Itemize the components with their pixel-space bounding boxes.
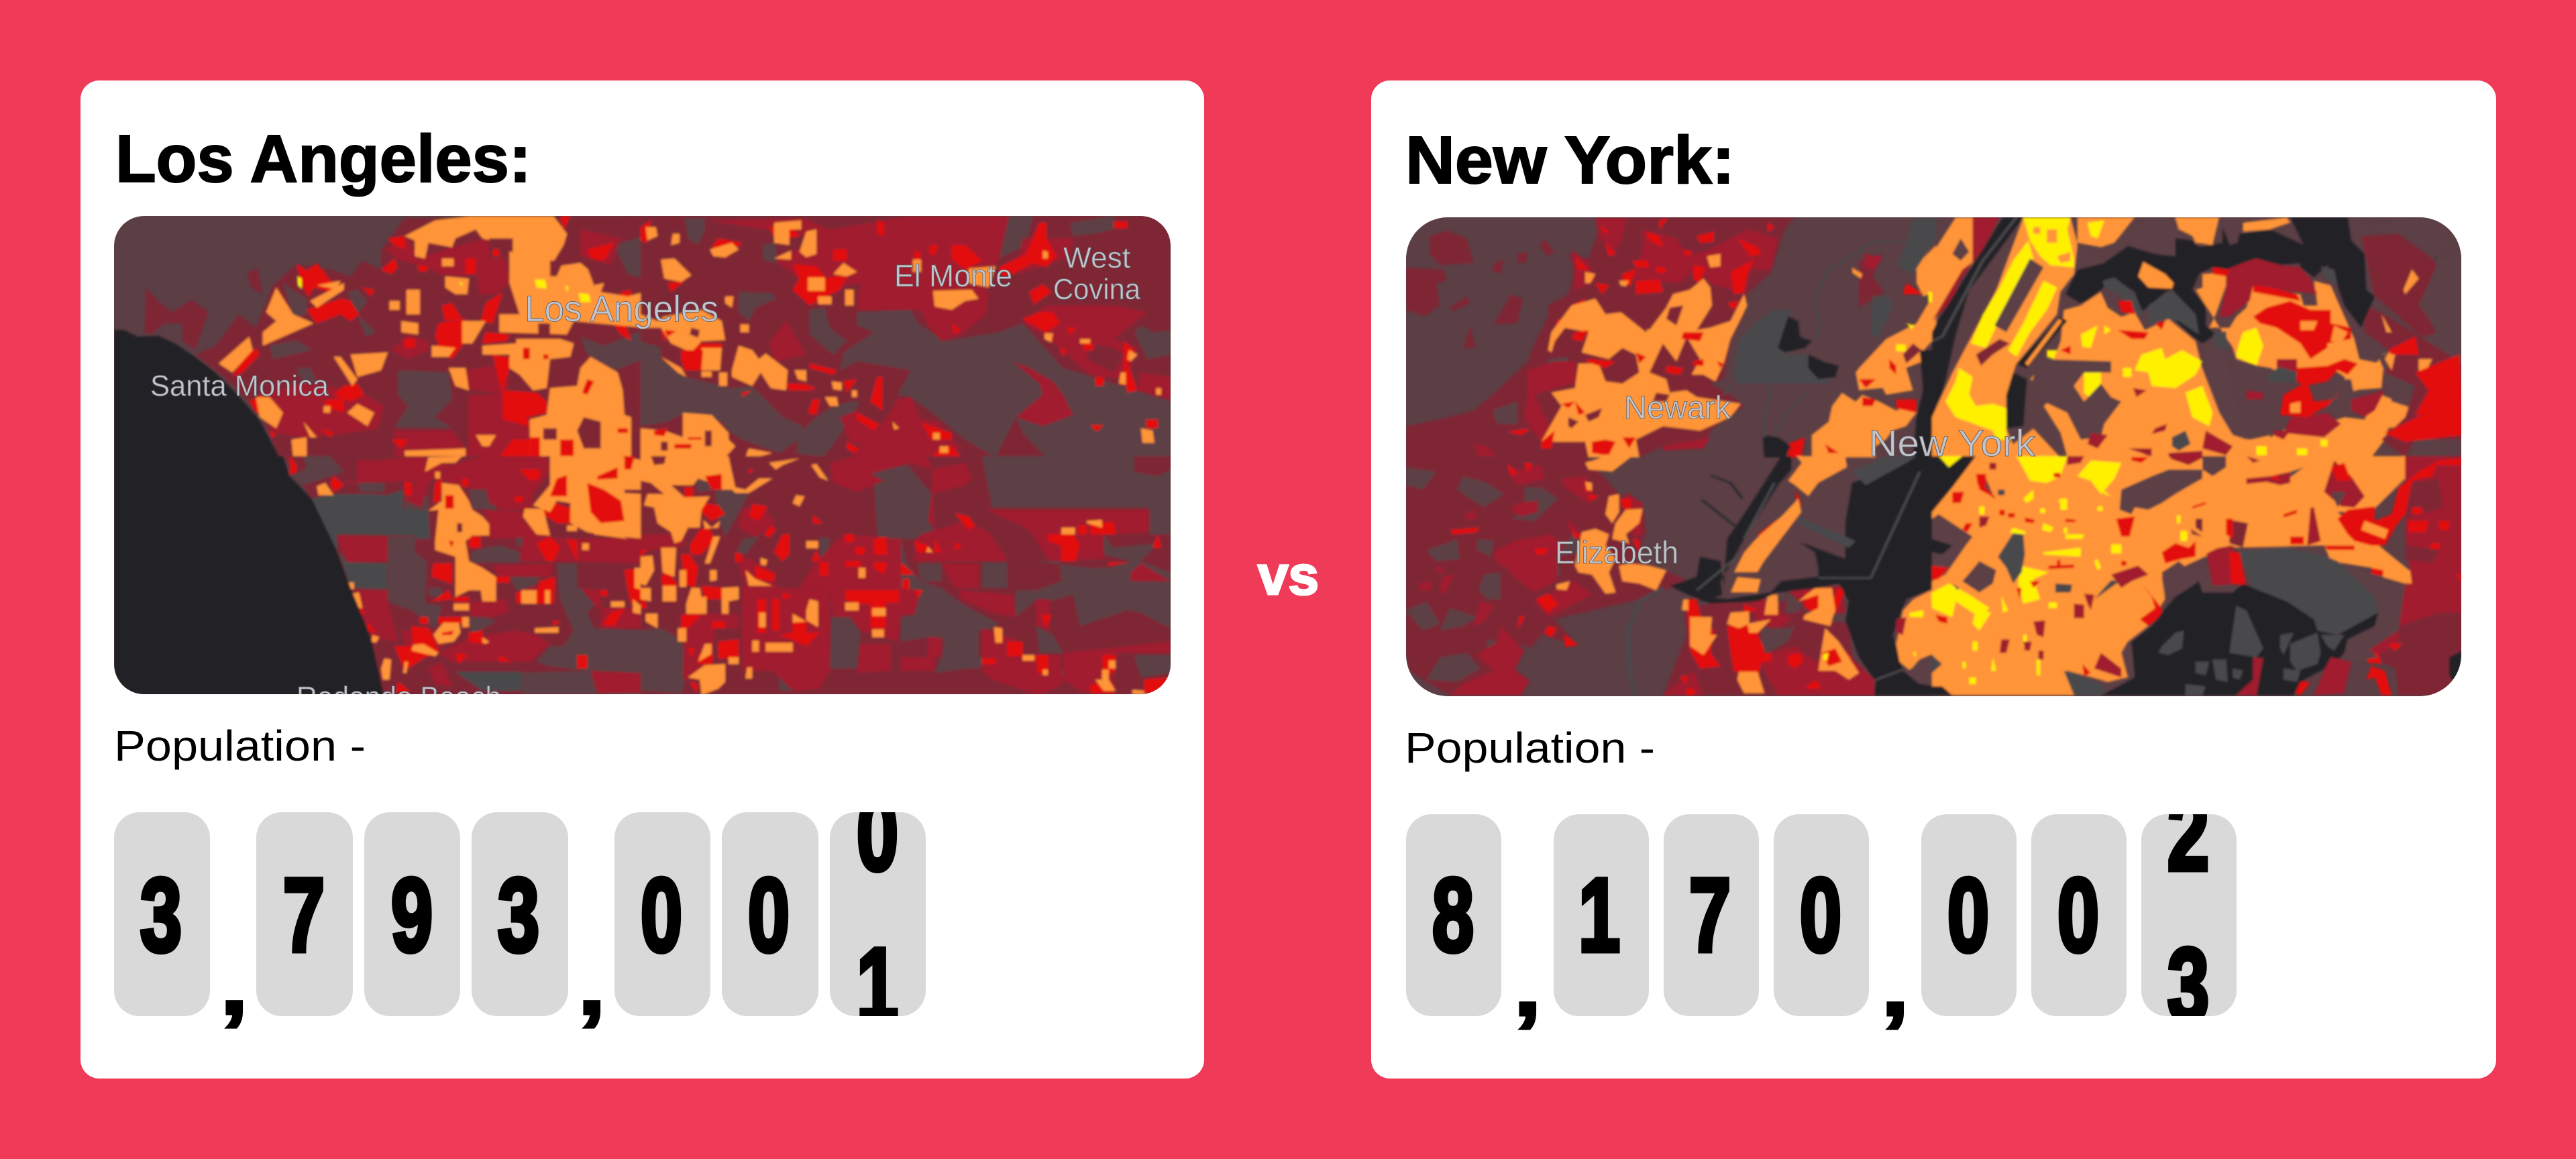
population counter: Los Angeles: [114, 775, 926, 1043]
map: Los Angeles: [114, 216, 1171, 714]
label: Santa Monica: Santa Monica: [150, 370, 329, 402]
population counter: New York: 1: [1578, 857, 1620, 973]
population counter: New York: 0: [2057, 857, 2099, 973]
population counter: New York: 2: [2167, 775, 2209, 892]
heading: New York: New York:: [1405, 123, 1735, 198]
label: Los Angeles: Los Angeles: [525, 288, 718, 329]
population counter: Los Angeles: 0: [748, 857, 790, 973]
population counter: Los Angeles: 1: [857, 926, 898, 1043]
label: Elizabeth: Elizabeth: [1555, 535, 1678, 570]
vs label: vs: [1258, 545, 1319, 606]
label: Covina: Covina: [1053, 273, 1140, 306]
label: El Monte: El Monte: [894, 258, 1012, 293]
map: New York: [1406, 217, 2462, 696]
population counter: Los Angeles: 7: [283, 857, 325, 973]
card: Los Angeles: [80, 80, 1204, 1079]
card: New York: [1371, 80, 2496, 1079]
population counter: Los Angeles: 0: [641, 857, 682, 973]
population counter: Los Angeles: 9: [391, 857, 433, 973]
population counter: New York: 7: [1689, 857, 1731, 973]
population counter: Los Angeles: 3: [498, 857, 539, 973]
panel: Los Angeles: [80, 80, 1204, 1079]
population counter: New York: ,: [1880, 937, 1910, 1034]
heading: Los Angeles: Los Angeles:: [115, 121, 531, 197]
label: Redondo Beach: Redondo Beach: [297, 681, 501, 714]
population counter: New York: 0: [1800, 857, 1841, 973]
label: Newark: Newark: [1624, 390, 1731, 426]
population counter: Los Angeles: 0: [857, 775, 898, 892]
population label: Los Angeles: Population -: [114, 722, 366, 770]
population counter: Los Angeles: ,: [577, 936, 606, 1033]
panel: New York: [1371, 80, 2496, 1079]
label: West: West: [1063, 241, 1130, 274]
label: New York: New York: [1869, 422, 2036, 464]
population counter: New York: 3: [2167, 926, 2209, 1043]
population counter: New York: [1406, 775, 2237, 1043]
population counter: Los Angeles: ,: [219, 936, 249, 1033]
population label: New York: Population -: [1405, 724, 1655, 772]
population counter: New York: 8: [1432, 857, 1474, 973]
population counter: Los Angeles: 3: [140, 857, 182, 973]
population counter: New York: ,: [1513, 937, 1542, 1034]
population counter: New York: 0: [1947, 857, 1989, 973]
